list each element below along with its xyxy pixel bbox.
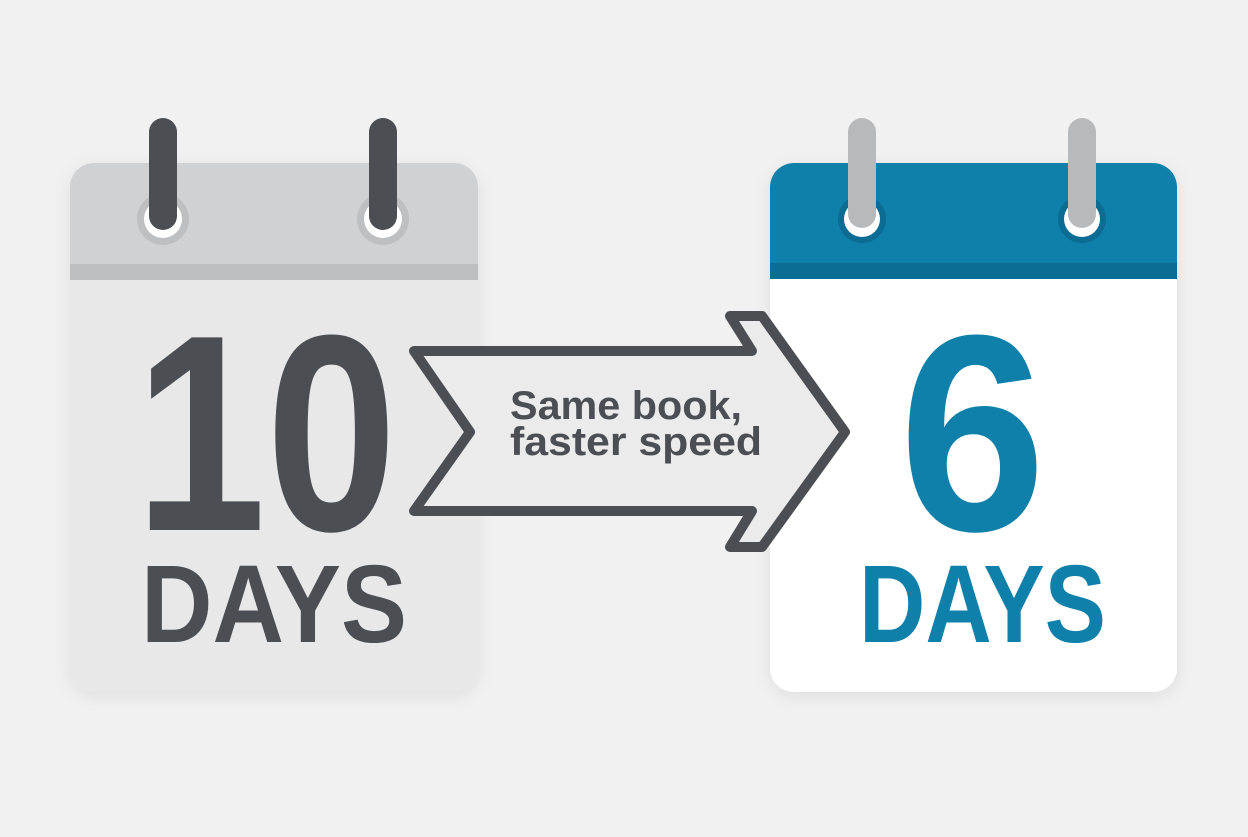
number 6: 6 <box>899 278 1046 590</box>
right calendar: 6 days <box>770 118 1177 692</box>
left calendar: 10 days <box>70 118 478 692</box>
label DAYS: DAYS <box>141 543 407 666</box>
arrow with caption: faster speed <box>510 420 762 464</box>
label DAYS: DAYS <box>859 543 1106 666</box>
number 10: 10 <box>135 278 397 590</box>
arrow with caption <box>414 316 845 547</box>
caption: Same book, <box>510 384 742 428</box>
